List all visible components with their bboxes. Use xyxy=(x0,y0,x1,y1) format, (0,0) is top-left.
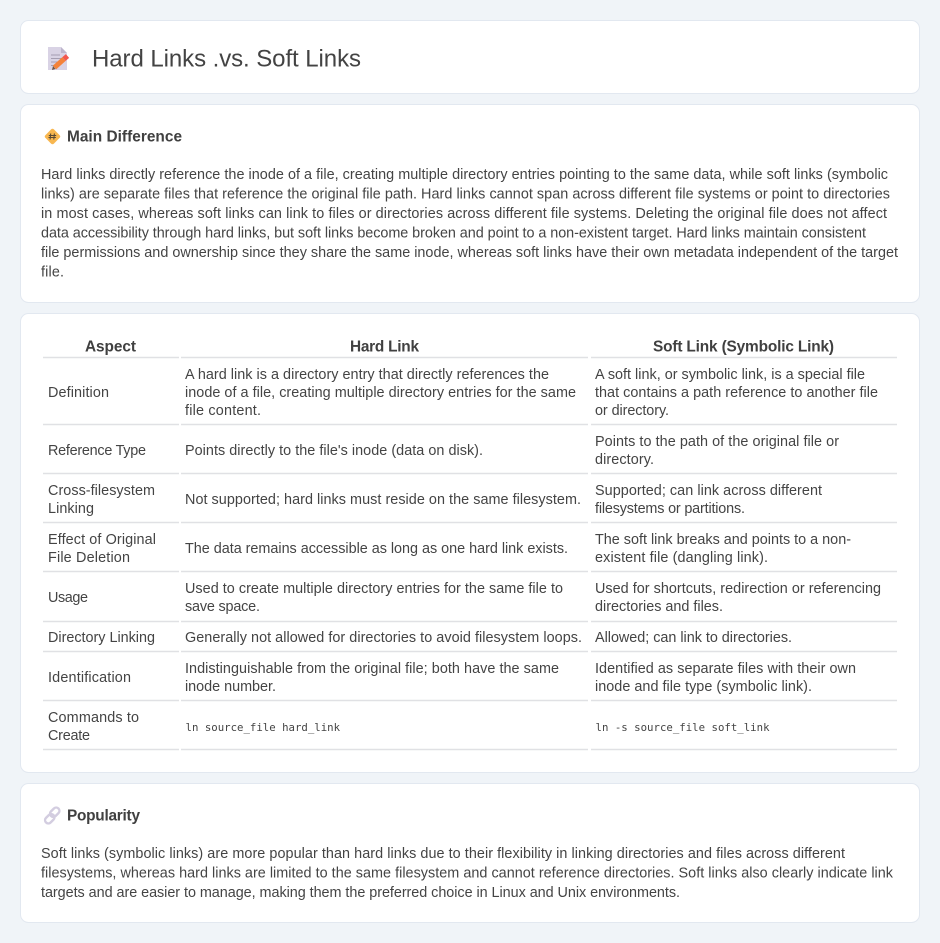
row: definition: inode of a file, creating multiple directory entries for the same xyxy=(185,385,576,401)
row: definition: that contains a path reference to another file xyxy=(595,385,878,401)
row: directory linking: Directory Linking xyxy=(48,630,155,646)
row: usage: Usage xyxy=(48,590,88,606)
row: definition: A soft link, or symbolic link, is a special file xyxy=(595,367,865,383)
row: reference type: Points directly to the file's inode (data on disk). xyxy=(185,443,483,459)
row: commands to create: ln -s source_file soft_link xyxy=(596,721,770,734)
row: effect of original file deletion: File Deletion xyxy=(48,550,130,566)
row: definition: or directory. xyxy=(595,403,669,419)
row: effect of original file deletion: The soft link breaks and points to a non- xyxy=(595,532,851,548)
row: cross-filesystem linking: filesystems or partitions. xyxy=(595,501,745,517)
row: definition xyxy=(48,367,878,419)
row: definition: file content. xyxy=(185,403,261,419)
text block: popularity: filesystems, whereas hard links are limited to the same filesystem and cannot reference directories. Soft links also clearly indicate link xyxy=(41,866,894,882)
row: commands to create: Create xyxy=(48,728,90,744)
panel: comparison table xyxy=(20,314,920,772)
row: identification: Identified as separate files with their own xyxy=(595,661,856,677)
text block: main difference: links) are separate files that reference the original file path. Hard links cannot span across different file systems or point to directories xyxy=(41,186,890,202)
row: effect of original file deletion xyxy=(48,532,851,566)
row: cross-filesystem linking: Cross-filesystem xyxy=(48,483,155,499)
row: cross-filesystem linking: Linking xyxy=(48,501,94,517)
panel: title header xyxy=(20,20,920,94)
panel: main difference xyxy=(20,104,920,302)
text block: main difference: in most cases, whereas soft links can link to files or directories across different file systems. Deleting the original file does not affect xyxy=(41,206,887,222)
row: reference type: Points to the path of the original file or xyxy=(595,434,839,450)
row: definition: Definition xyxy=(48,385,109,401)
row: identification: Indistinguishable from the original file; both have the same xyxy=(185,661,559,677)
table header row: Aspect xyxy=(85,338,136,356)
text block: main difference: file. xyxy=(41,264,64,280)
icon: warning diamond xyxy=(44,128,61,145)
icon: chain link xyxy=(44,806,61,825)
heading: main difference: Main Difference xyxy=(67,128,182,146)
table header row: Soft Link (Symbolic Link) xyxy=(653,338,834,356)
row: usage: Used for shortcuts, redirection or referencing xyxy=(595,581,881,597)
row: directory linking: Allowed; can link to directories. xyxy=(595,630,792,646)
text block: main difference: data accessibility through hard links, but soft links become broken and point to a non-existent target. Hard links maintain consistent xyxy=(41,226,866,242)
text block: main difference xyxy=(41,167,898,280)
text block: main difference: file permissions and ownership since they share the same inode, whereas soft links have their own metadata independent of the target xyxy=(41,245,898,261)
row: identification: inode number. xyxy=(185,679,276,695)
row: commands to create xyxy=(48,710,770,744)
text block: popularity: targets and are easier to manage, making them the preferred choice in Linux and Unix environments. xyxy=(41,885,680,901)
row: identification: inode and file type (symbolic link). xyxy=(595,679,812,695)
row: effect of original file deletion: Effect of Original xyxy=(48,532,156,548)
row: effect of original file deletion: existent file (dangling link). xyxy=(595,550,768,566)
row: reference type: Reference Type xyxy=(48,443,146,459)
row: commands to create: Commands to xyxy=(48,710,139,726)
row: cross-filesystem linking: Supported; can link across different xyxy=(595,483,822,499)
row: definition: A hard link is a directory entry that directly references the xyxy=(185,367,549,383)
table header row: Hard Link xyxy=(350,338,419,356)
row: usage: Used to create multiple directory entries for the same file to xyxy=(185,581,563,597)
text block: popularity: Soft links (symbolic links) are more popular than hard links due to their flexibility in linking directories and files across different xyxy=(41,846,845,862)
table header row xyxy=(85,338,834,356)
row: directory linking xyxy=(48,630,792,646)
row: commands to create: ln source_file hard_link xyxy=(186,721,341,734)
panel: popularity xyxy=(20,784,920,922)
row: identification: Identification xyxy=(48,670,131,686)
row: effect of original file deletion: The data remains accessible as long as one hard link exists. xyxy=(185,541,568,557)
title: Hard Links .vs. Soft Links xyxy=(92,46,361,72)
row: reference type: directory. xyxy=(595,452,654,468)
row: usage: save space. xyxy=(185,599,260,615)
row: cross-filesystem linking: Not supported; hard links must reside on the same filesystem. xyxy=(185,492,581,508)
row: usage xyxy=(48,581,881,615)
text block: popularity xyxy=(41,846,894,901)
heading: popularity: Popularity xyxy=(67,808,140,824)
icon: document with pencil xyxy=(48,47,68,70)
row: reference type xyxy=(48,434,839,468)
row: usage: directories and files. xyxy=(595,599,723,615)
text block: main difference: Hard links directly reference the inode of a file, creating multiple directory entries pointing to the same data, while soft links (symbolic xyxy=(41,167,888,183)
row: identification xyxy=(48,661,856,695)
row: directory linking: Generally not allowed for directories to avoid filesystem loops. xyxy=(185,630,582,646)
row: cross-filesystem linking xyxy=(48,483,822,517)
